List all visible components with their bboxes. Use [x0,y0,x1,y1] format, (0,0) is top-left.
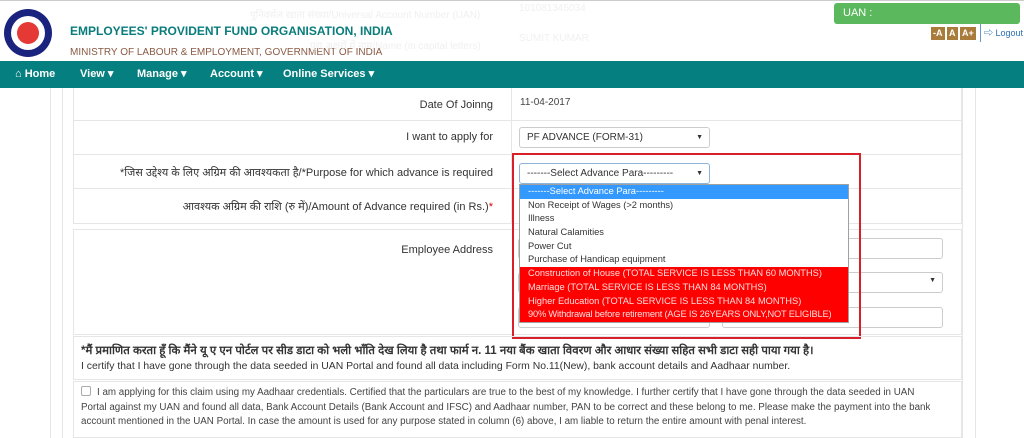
font size buttons [931,27,976,40]
address panel [73,229,962,335]
faded background text: पुनिवर्सल खाता संख्या/Universal Account Number (UAN) [250,10,480,21]
dropdown list: Marriage (TOTAL SERVICE IS LESS THAN 84 MONTHS) [528,282,767,292]
logout link [980,24,1023,42]
label: purpose: *जिस उद्देश्य के लिए अग्रिम की आवश्यकता है/*Purpose for which advance is required [120,167,493,179]
header: 101081345034 [519,3,586,14]
nav bar: ⌂ Home [15,68,55,80]
callout: red highlight box with dropdown [512,153,861,339]
address panel: ▼ [929,277,936,284]
nav bar [0,61,1024,88]
dropdown list: Illness [528,213,554,223]
header [0,0,1024,61]
dropdown list: Purchase of Handicap equipment [528,254,665,264]
select: advance para: ▼ [696,170,703,177]
font size buttons: A [949,28,956,38]
header: SUMIT KUMAR [519,33,589,44]
dropdown list: Higher Education (TOTAL SERVICE IS LESS THAN 84 MONTHS) [528,296,801,306]
dropdown list: -------Select Advance Para--------- [528,186,664,196]
label: employee address: Employee Address [401,244,493,256]
dropdown list: 90% Withdrawal before retirement (AGE IS 26YEARS ONLY,NOT ELIGIBLE) [528,309,831,319]
font size buttons: A+ [962,28,974,38]
select: form 31 [519,127,710,148]
nav bar: View ▾ [80,68,113,80]
label: date of joining: Date Of Joinng [420,99,493,111]
page frame lines [50,88,51,438]
icon: EPFO logo [4,9,52,57]
select: form 31: ▼ [696,134,703,141]
label: apply for: I want to apply for [406,131,493,143]
select: advance para [519,163,710,184]
header: पूरा अक्षरों में नाम/Name (in capital letters) [310,41,481,52]
certify declaration [73,336,962,380]
dropdown list: Construction of House (TOTAL SERVICE IS LESS THAN 60 MONTHS) [528,268,822,278]
nav bar: Manage ▾ [137,68,187,80]
aadhaar consent checkbox text: I am applying for this claim using my Aadhaar credentials. Certified that the particulars are true to the best of my knowledge. I further certify that I have gone through the data seeded in UAN Portal against my UAN and found all data, Bank Account Details (Bank Account and IFSC) and Aadhaar number, PAN to be correct and these belong to me. Please make the payment into the bank account mentioned in the UAN Portal. In case the amount is used for any purpose stated in column (6) above, I am liable to return the entire amount with penal interest. [81,387,930,427]
font size buttons: -A [933,28,942,38]
dropdown list: Natural Calamities [528,227,604,237]
logout link: ⇨ Logout [984,28,1023,38]
dropdown list: Power Cut [528,241,571,251]
value: date: 11-04-2017 [520,97,570,108]
dropdown list: Non Receipt of Wages (>2 months) [528,200,673,210]
nav bar: Online Services ▾ [283,68,374,80]
address inputs [518,238,943,259]
select: form 31: PF ADVANCE (FORM-31) [527,132,643,143]
UAN badge [834,3,1020,24]
dropdown list [519,184,849,323]
certify declaration: I certify that I have gone through the data seeded in UAN Portal and found all data including Form No.11(New), bank account details and Aadhaar number. [81,361,790,372]
heading: organisation name: EMPLOYEES' PROVIDENT FUND ORGANISATION, INDIA [70,24,393,38]
text: ministry: MINISTRY OF LABOUR & EMPLOYMENT, GOVERNMENT OF INDIA [70,47,382,58]
certify declaration: *मैं प्रमाणित करता हूँ कि मैंने यू ए एन पोर्टल पर सीड डाटा को भली भाँति देख लिया है तथा फार्म न. 11 नया बैंक खाता विवरण और आधार संख्या सहित सभी डाटा सही पाया गया है। [81,345,813,357]
UAN badge: UAN : [843,7,872,19]
label: amount: आवश्यक अग्रिम की राशि (रु में)/Amount of Advance required (in Rs.)* [183,201,493,213]
nav bar: Account ▾ [210,68,263,80]
form table [73,88,962,224]
select: advance para: -------Select Advance Para--------- [527,168,673,179]
aadhaar consent checkbox text [73,381,962,438]
